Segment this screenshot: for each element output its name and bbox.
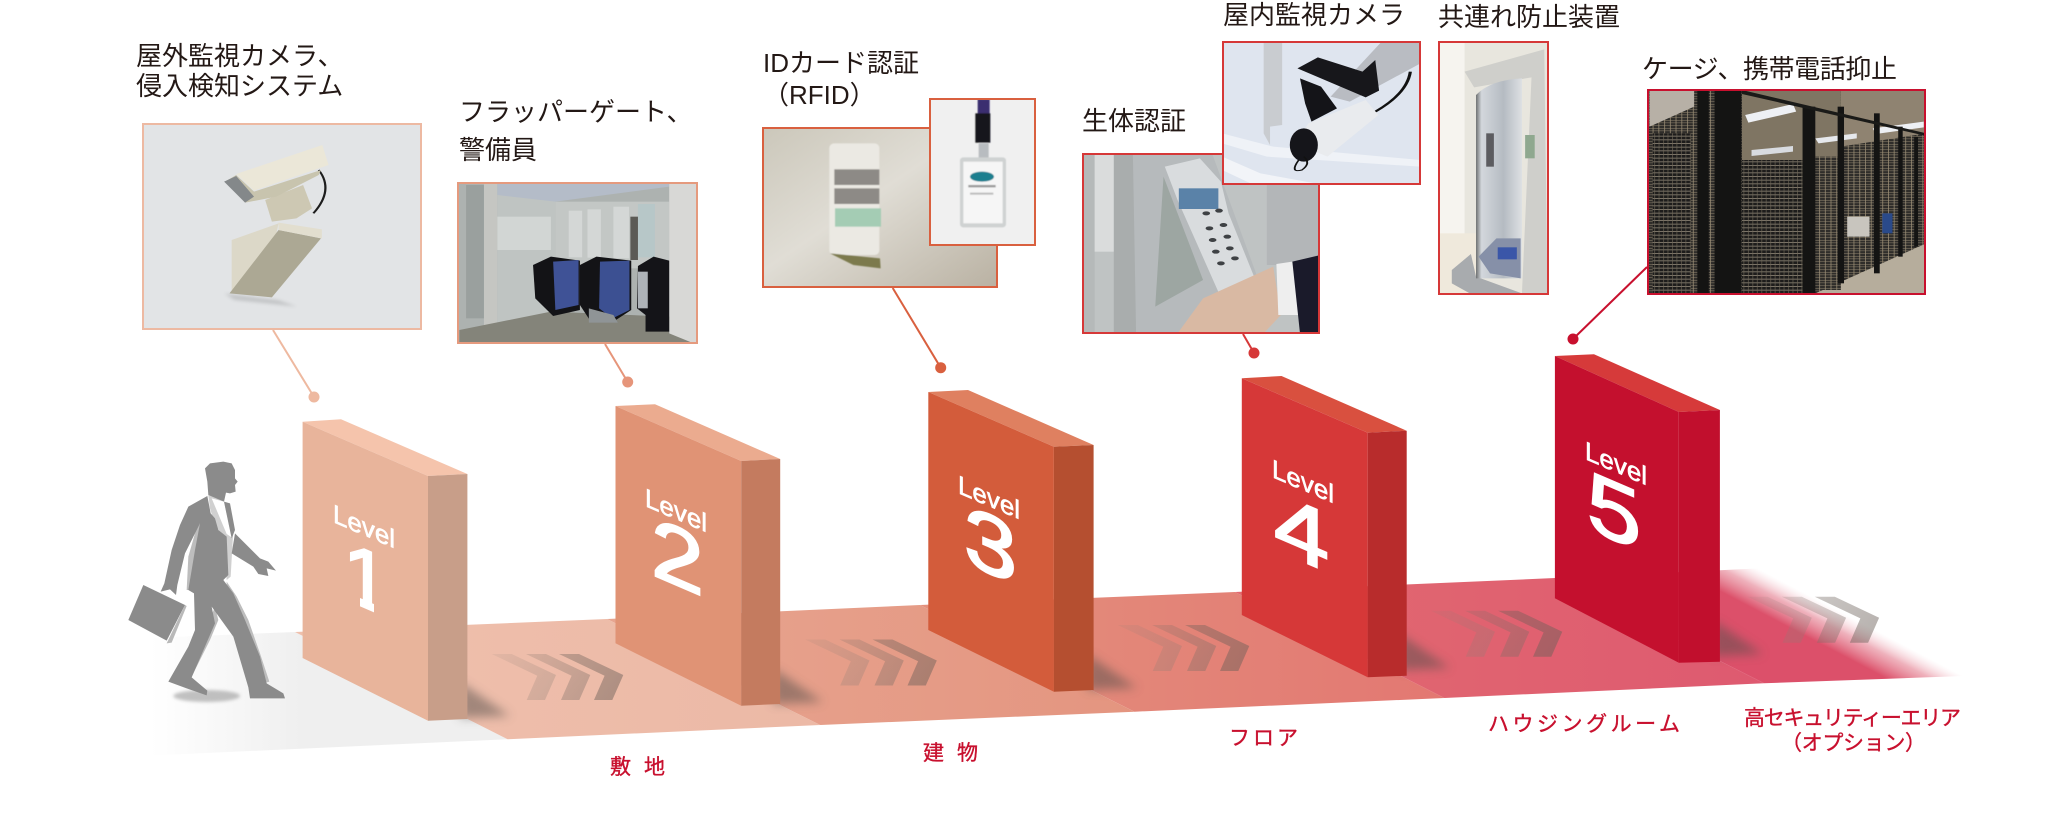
photo: server cage	[1647, 89, 1926, 295]
heading: outdoor camera and intrusion detection: 屋外監視カメラ、	[136, 41, 343, 71]
label: Level 4: Level	[1272, 453, 1334, 509]
label: Level 5: 5	[1587, 452, 1641, 569]
heading: ID card authentication: （RFID）	[763, 80, 876, 110]
label: Level 3: Level	[958, 469, 1020, 525]
photo: ID card on lanyard	[929, 98, 1036, 246]
photo: RFID card reader	[762, 127, 999, 288]
photo: biometric authentication	[1082, 153, 1320, 334]
label: Level 1	[334, 504, 394, 612]
zone label: high security area (option): （オプション）	[1781, 732, 1926, 755]
arrows: chevrons towards level 3	[805, 640, 937, 686]
heading: anti-tailgating device: 共連れ防止装置	[1438, 2, 1620, 32]
heading: biometric authentication: 生体認証	[1082, 106, 1186, 136]
zone label: housing room: ハウジングルーム	[1488, 713, 1680, 736]
arrows: chevrons towards level 4	[1118, 625, 1249, 671]
label: Level 2: Level	[645, 482, 707, 538]
heading: flapper gate and guards: 警備員	[459, 135, 537, 165]
leader line: level 2	[605, 344, 633, 388]
photo: flapper gates	[457, 182, 698, 344]
photo: outdoor surveillance camera	[142, 123, 422, 330]
photo: anti-tailgating booth	[1438, 41, 1549, 295]
label: Level 2	[645, 482, 707, 615]
heading: ID card authentication	[763, 48, 919, 110]
arrows: chevrons towards level 2	[492, 654, 623, 700]
label: Level 4: 4	[1274, 473, 1329, 591]
wall: level 5	[1555, 354, 1720, 663]
heading: cage and mobile phone restriction: ケージ、携帯電話抑止	[1642, 54, 1897, 84]
wall: level 1	[303, 419, 467, 721]
photo: indoor surveillance camera	[1222, 41, 1421, 185]
zone label: high security area (option)	[1744, 707, 1961, 755]
zone label: floor: フロア	[1229, 727, 1298, 750]
leader line: level 1	[273, 330, 320, 402]
arrows: chevrons towards level 5	[1431, 611, 1562, 657]
base shadows beside walls	[460, 620, 1763, 718]
heading: indoor surveillance camera: 屋内監視カメラ	[1223, 0, 1405, 30]
label: Level 5	[1585, 435, 1647, 569]
label: Level 4	[1272, 453, 1334, 591]
wall: level 3	[928, 390, 1094, 692]
label: Level 5: Level	[1585, 435, 1647, 491]
heading: outdoor camera and intrusion detection: 侵入検知システム	[136, 71, 343, 101]
leader line: level 4	[1243, 334, 1260, 358]
floor path	[100, 568, 1963, 756]
label: Level 3	[958, 469, 1020, 603]
arrows: chevrons towards high security area	[1748, 597, 1879, 643]
wall: level 2	[616, 404, 780, 706]
zone label: site: 敷 地	[610, 756, 665, 779]
heading: flapper gate and guards: フラッパーゲート、	[459, 97, 692, 127]
label: Level 3: 3	[964, 486, 1017, 603]
label: Level 1: 1	[343, 522, 389, 636]
zone label: high security area (option): 高セキュリティーエリア	[1744, 707, 1961, 730]
leader line: level 3	[893, 288, 946, 373]
leader line: level 5	[1568, 267, 1647, 344]
heading: outdoor camera and intrusion detection	[136, 41, 343, 101]
icon: walking businessman with briefcase	[128, 462, 285, 702]
heading: flapper gate and guards	[459, 97, 692, 165]
wall: level 4	[1242, 376, 1407, 677]
label: Level 2: 2	[651, 498, 704, 615]
zone label: building: 建 物	[923, 742, 978, 765]
heading: ID card authentication: IDカード認証	[763, 48, 919, 78]
label: Level 1: Level	[333, 498, 395, 554]
